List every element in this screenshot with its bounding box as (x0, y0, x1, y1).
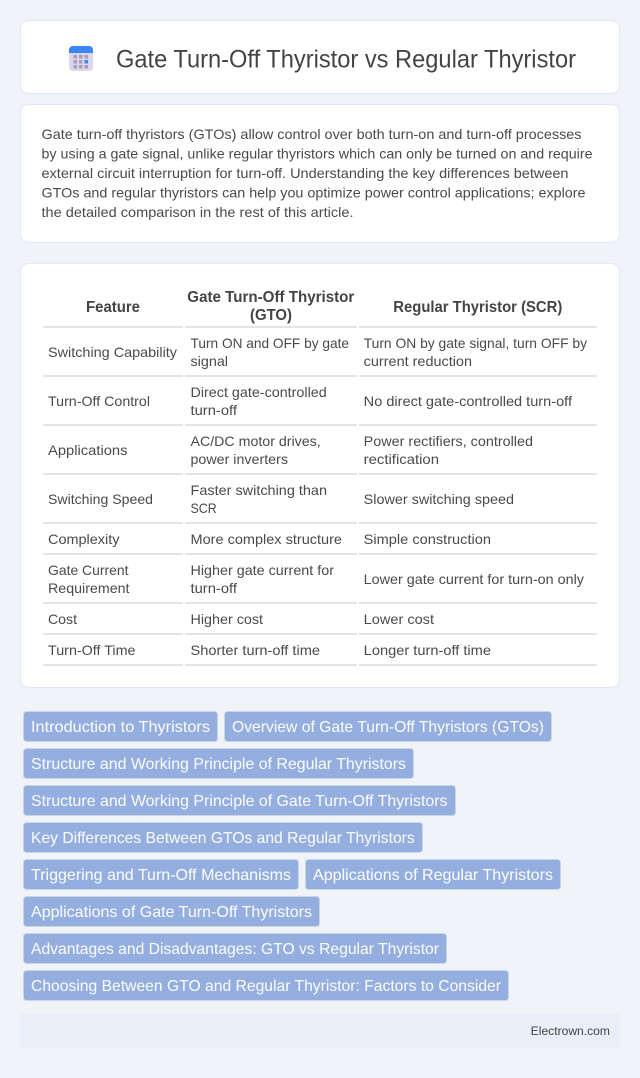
row: applications: Applications (48, 442, 128, 458)
row: switching speed: Switching Speed (48, 491, 153, 507)
tag: structure of GTOs: Structure and Working Principle of Gate Turn-Off Thyristors (31, 793, 448, 810)
intro paragraph: by using a gate signal, unlike regular thyristors which can only be turned on and require (42, 146, 593, 162)
tag: choosing between: Choosing Between GTO and Regular Thyristor: Factors to Consider (31, 978, 502, 995)
row: gate current requirement (48, 562, 584, 596)
footer (20, 1014, 620, 1048)
icon: calendar grid (69, 46, 93, 71)
row: gate current requirement: turn-off (190, 580, 237, 596)
row: turn-off control: Direct gate-controlled (190, 384, 327, 400)
intro paragraph: external circuit interruption for turn-off. Understanding the key differences between (42, 165, 568, 181)
tag: choosing between (24, 970, 508, 1000)
row: complexity (48, 531, 491, 547)
row: turn-off time: Shorter turn-off time (190, 642, 320, 658)
tag: key differences: Key Differences Between GTOs and Regular Thyristors (31, 830, 415, 847)
row: switching capability: current reduction (364, 353, 472, 369)
row: applications (48, 433, 533, 467)
panel: topic tags (24, 712, 560, 1000)
row: turn-off time (48, 642, 491, 658)
row: complexity: Complexity (48, 531, 120, 547)
tag: advantages and disadvantages (24, 934, 446, 964)
row: switching speed: Slower switching speed (364, 491, 514, 507)
row: complexity: Simple construction (364, 531, 491, 547)
intro paragraph: GTOs and regular thyristors can help you optimize power control applications; explore (42, 184, 586, 200)
tag: triggering and turn-off: Triggering and Turn-Off Mechanisms (31, 867, 291, 884)
title: Gate Turn-Off Thyristor vs Regular Thyristor (116, 46, 576, 74)
row: turn-off time: Longer turn-off time (364, 642, 491, 658)
intro paragraph: Gate turn-off thyristors (GTOs) allow control over both turn-on and turn-off processes (42, 126, 582, 142)
tag: key differences (24, 822, 422, 852)
table header row: Feature (86, 299, 140, 316)
row: cost: Higher cost (190, 611, 263, 627)
table header row: Gate Turn-Off Thyristor (187, 289, 354, 306)
row: gate current requirement: Lower gate current for turn-on only (364, 571, 584, 587)
row: switching capability: Switching Capability (48, 344, 177, 360)
footer credit: Electrown.com (531, 1024, 610, 1038)
row: switching capability: signal (190, 353, 228, 369)
row: gate current requirement: Requirement (48, 580, 130, 596)
table header row (86, 289, 562, 324)
row: switching capability: Turn ON and OFF by gate (190, 335, 349, 351)
tag: introduction to thyristors: Introduction to Thyristors (31, 719, 210, 736)
row: cost: Lower cost (364, 611, 434, 627)
row: turn-off control: No direct gate-controlled turn-off (364, 393, 572, 409)
row: gate current requirement: Higher gate current for (190, 562, 334, 578)
intro paragraph: the detailed comparison in the rest of this article. (42, 204, 354, 220)
row: switching capability: Turn ON by gate signal, turn OFF by (364, 335, 587, 351)
row: switching speed (48, 482, 514, 516)
row: cost (48, 611, 434, 627)
panel: comparison table (20, 264, 620, 688)
row: applications: power inverters (190, 451, 288, 467)
row: applications: Power rectifiers, controlled (364, 433, 533, 449)
row: cost: Cost (48, 611, 77, 627)
row: switching speed: SCR (190, 500, 217, 516)
row: turn-off control: Turn-Off Control (48, 393, 150, 409)
row: turn-off time: Turn-Off Time (48, 642, 136, 658)
tag: structure of GTOs (24, 786, 456, 816)
row: turn-off control: turn-off (190, 402, 237, 418)
tag: applications of regular thyristors: Applications of Regular Thyristors (313, 867, 553, 884)
intro paragraph (42, 126, 593, 220)
row: applications: AC/DC motor drives, (190, 433, 321, 449)
tag: applications of GTOs (24, 896, 320, 926)
row: switching capability (48, 335, 587, 369)
panel: title header (20, 20, 620, 94)
panel: introduction (20, 104, 620, 242)
tag: structure of regular thyristors (24, 748, 414, 778)
row: complexity: More complex structure (190, 531, 342, 547)
row: turn-off control (48, 384, 572, 418)
table header row: Regular Thyristor (SCR) (393, 299, 562, 316)
tag: introduction to thyristors (24, 712, 218, 742)
tag: overview of GTOs: Overview of Gate Turn-Off Thyristors (GTOs) (232, 719, 544, 736)
tag: overview of GTOs (224, 712, 552, 742)
row: applications: rectification (364, 451, 439, 467)
tag: structure of regular thyristors: Structure and Working Principle of Regular Thyristors (31, 756, 406, 773)
row: gate current requirement: Gate Current (48, 562, 129, 578)
tag: applications of regular thyristors (306, 860, 560, 890)
row: switching speed: Faster switching than (190, 482, 327, 498)
tag: triggering and turn-off (24, 860, 298, 890)
table header row: (GTO) (250, 307, 292, 324)
tag: applications of GTOs: Applications of Gate Turn-Off Thyristors (31, 904, 312, 921)
tag: advantages and disadvantages: Advantages and Disadvantages: GTO vs Regular Thyristor (31, 941, 440, 958)
